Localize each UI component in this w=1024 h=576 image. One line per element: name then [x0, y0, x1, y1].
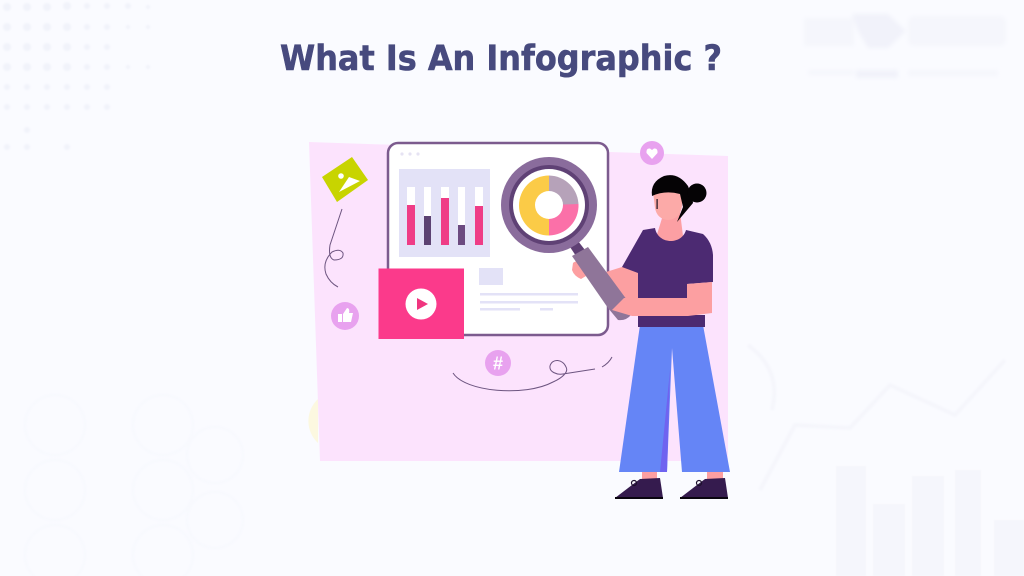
magnifying glass — [501, 157, 631, 320]
faint dot grid top-left — [3, 2, 150, 150]
faint circles bottom-left — [25, 395, 243, 576]
pants — [619, 325, 730, 472]
ear — [682, 196, 690, 206]
back hand — [572, 261, 586, 279]
icon: heart — [640, 141, 664, 165]
eye line — [656, 199, 658, 209]
icon: hashtag: # — [493, 354, 503, 374]
icon: hashtag — [485, 350, 511, 376]
left leg ankle — [642, 472, 657, 480]
video card — [378, 268, 464, 339]
right leg ankle — [707, 472, 723, 480]
forearm over handle — [612, 282, 712, 316]
text placeholder block — [479, 268, 578, 310]
magnifier handle — [572, 247, 631, 320]
squiggle bottom — [453, 357, 612, 391]
magnifier neck — [570, 241, 585, 256]
donut chart — [519, 176, 579, 236]
icon: thumbs up — [331, 302, 359, 330]
left shoe — [615, 478, 663, 499]
faint bar chart bottom-right — [836, 466, 1024, 576]
title: What Is An Infographic ? — [280, 39, 722, 79]
icon: image tag — [322, 157, 368, 202]
dashboard card — [388, 143, 608, 335]
hair bun — [688, 184, 706, 202]
right shoe — [680, 478, 728, 499]
bar chart — [399, 169, 490, 257]
yellow partial circle behind panel — [308, 399, 318, 443]
window dots — [400, 152, 420, 156]
lens — [501, 157, 597, 253]
faint line chart right — [748, 345, 1005, 490]
person — [606, 175, 730, 499]
pink backdrop panel — [309, 142, 728, 461]
squiggle left — [325, 209, 343, 287]
faint process arrows top-right — [804, 14, 1006, 78]
upper arm and hand — [606, 263, 640, 302]
neck — [654, 212, 684, 244]
face — [653, 192, 682, 220]
shirt — [622, 228, 713, 327]
hair — [652, 175, 693, 222]
